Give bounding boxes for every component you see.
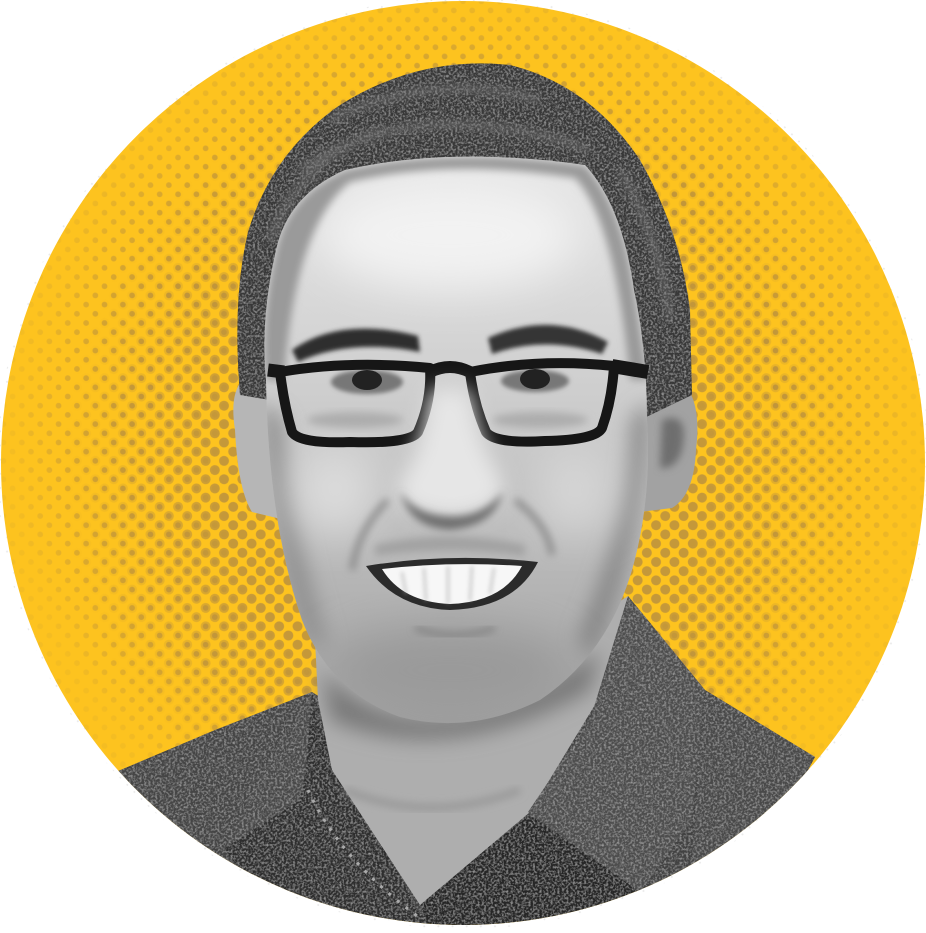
stubble on jaw	[348, 622, 552, 694]
smile lines	[352, 500, 388, 570]
cheek shading	[262, 400, 330, 650]
hair	[237, 63, 692, 420]
forehead highlight	[320, 180, 580, 290]
eyes	[331, 370, 403, 394]
nose	[399, 390, 502, 517]
glasses	[268, 363, 648, 442]
neck	[314, 596, 628, 905]
face	[264, 156, 648, 723]
shirt	[118, 596, 815, 933]
person	[118, 63, 815, 933]
shirt collar	[225, 596, 705, 892]
right ear	[644, 395, 698, 512]
left ear	[233, 384, 278, 518]
hairline shadow	[264, 157, 648, 380]
placket buttons	[308, 790, 420, 918]
mouth	[366, 558, 538, 610]
eyebrows	[292, 329, 420, 362]
